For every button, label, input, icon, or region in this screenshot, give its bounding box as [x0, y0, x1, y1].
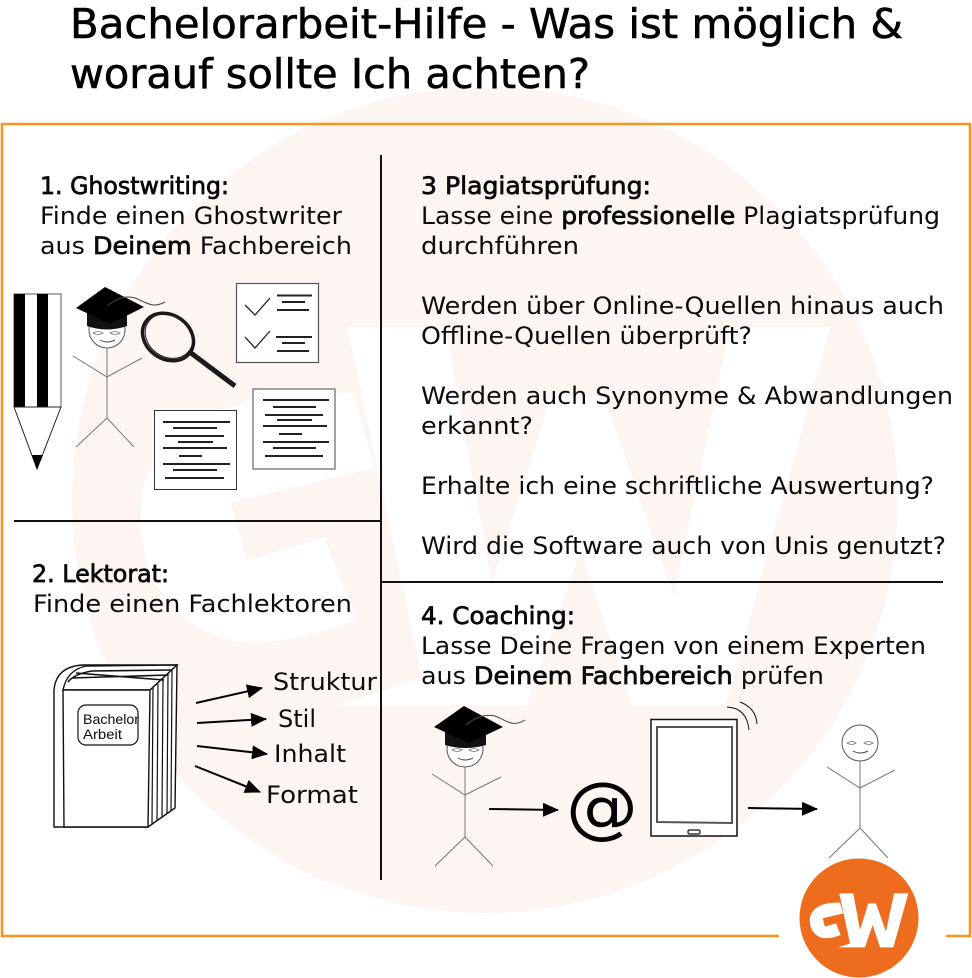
criteria labels: Stil	[278, 705, 316, 733]
panel: ghostwriting text: 1. Ghostwriting:	[40, 172, 229, 200]
panel: coaching text: Lasse Deine Fragen von einem Experten	[421, 632, 926, 660]
panel: plagiatsprüfung text: Offline-Quellen überprüft?	[421, 322, 752, 350]
title: worauf sollte Ich achten?	[70, 50, 590, 98]
panel: plagiatsprüfung text: erkannt?	[421, 412, 533, 440]
watermark logo	[72, 87, 898, 913]
icon: tablet	[651, 702, 757, 836]
title	[70, 0, 903, 98]
criteria labels: Struktur	[273, 668, 377, 696]
panel: lektorat text	[32, 560, 352, 618]
icon: text document	[154, 410, 236, 490]
criteria labels: Inhalt	[274, 740, 346, 768]
panel: plagiatsprüfung text: Werden über Online-Quellen hinaus auch	[421, 292, 944, 320]
icon: thesis book: Arbeit	[83, 727, 122, 742]
panel: ghostwriting text: Finde einen Ghostwriter	[40, 202, 342, 230]
arrow: tablet to person	[748, 808, 817, 809]
icon: stick figure	[827, 725, 895, 858]
panel: coaching text: 4. Coaching:	[421, 602, 575, 630]
arrows: book to criteria	[195, 688, 267, 792]
panel: ghostwriting text: aus Deinem Fachbereich	[40, 232, 352, 260]
icon: graduate stick figure	[73, 287, 165, 447]
arrow: student to email	[489, 809, 558, 810]
icon: at sign: @	[566, 768, 638, 847]
title: Bachelorarbeit-Hilfe - Was ist möglich &	[70, 0, 903, 48]
panel: plagiatsprüfung text: Lasse eine professionelle Plagiatsprüfung	[421, 202, 940, 230]
panel: plagiatsprüfung text: Wird die Software auch von Unis genutzt?	[421, 532, 946, 560]
quadrant dividers	[14, 155, 943, 880]
icon: checklist	[236, 284, 318, 362]
criteria labels: Format	[266, 781, 358, 809]
icon: thesis book	[54, 665, 177, 827]
panel: plagiatsprüfung text: Werden auch Synonyme & Abwandlungen	[421, 382, 953, 410]
panel: plagiatsprüfung text: Erhalte ich eine schriftliche Auswertung?	[421, 472, 934, 500]
logo: GW badge	[800, 858, 918, 978]
icon: pencil	[14, 294, 61, 469]
icon: text document	[253, 389, 335, 469]
panel: lektorat text: Finde einen Fachlektoren	[33, 590, 352, 618]
panel: lektorat text: 2. Lektorat:	[32, 560, 169, 588]
icon: graduate stick figure	[432, 706, 525, 866]
panel: plagiatsprüfung text: durchführen	[421, 232, 579, 260]
icon: magnifying glass	[133, 303, 235, 386]
panel: plagiatsprüfung text	[421, 172, 953, 560]
panel: coaching text	[421, 602, 926, 690]
panel: coaching text: aus Deinem Fachbereich prüfen	[421, 662, 824, 690]
icon: thesis book: Bachelor	[83, 712, 140, 727]
criteria labels	[266, 668, 377, 809]
panel: plagiatsprüfung text: 3 Plagiatsprüfung:	[421, 172, 651, 200]
panel: ghostwriting text	[40, 172, 352, 260]
